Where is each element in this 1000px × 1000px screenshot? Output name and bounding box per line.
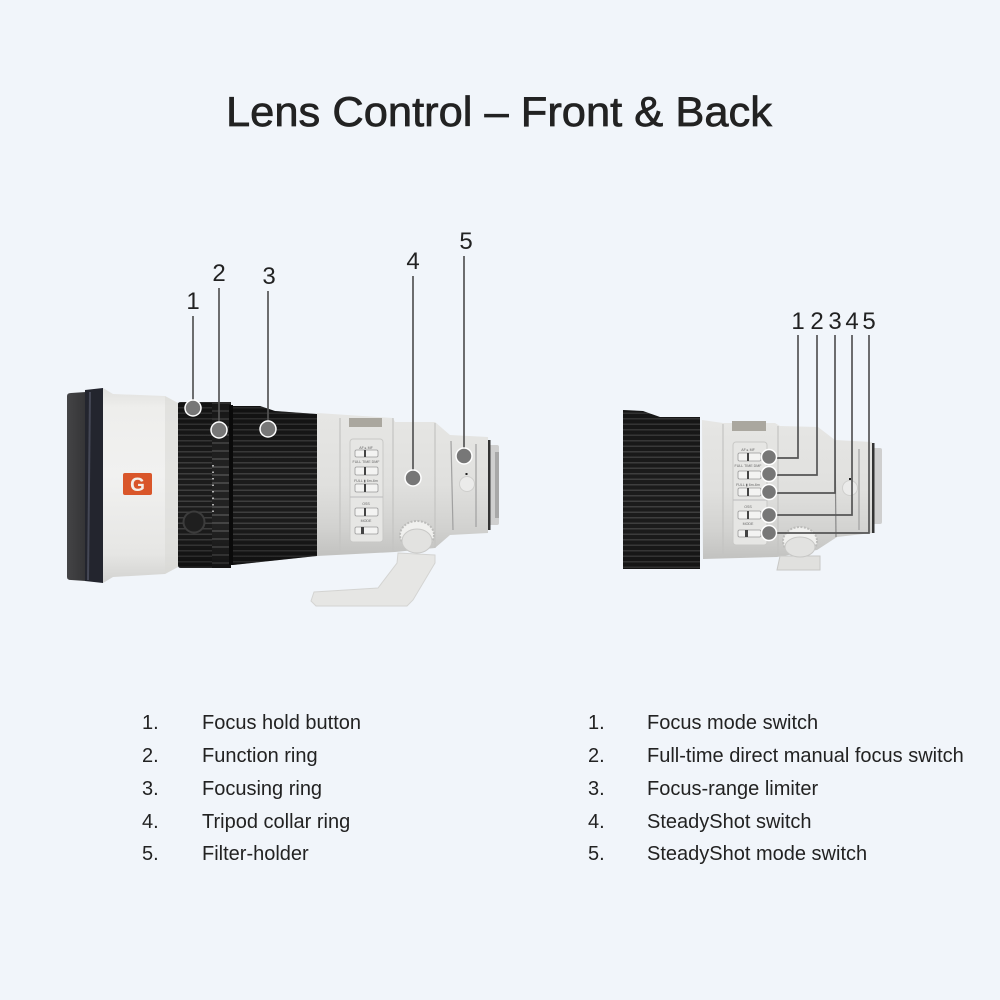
tripod foot bbox=[311, 553, 435, 606]
callout 1: 1 bbox=[791, 308, 805, 335]
legend: back controls: 3. bbox=[588, 778, 605, 800]
title: Lens Control – Front & Back bbox=[226, 88, 773, 135]
switch panel: FULL ▮ 6m-6m bbox=[354, 479, 378, 483]
callout 3: 3 bbox=[262, 263, 276, 290]
focusing ring bbox=[233, 406, 317, 565]
filter-holder knob bbox=[842, 478, 858, 496]
white front barrel bbox=[103, 388, 178, 583]
callout 5 bbox=[762, 308, 876, 540]
barrel shoulder shading bbox=[165, 396, 178, 574]
legend: back controls: 1. bbox=[588, 712, 605, 734]
callout 1: 1 bbox=[186, 288, 200, 315]
callout 5: 5 bbox=[459, 228, 473, 255]
lens body bbox=[702, 420, 872, 559]
AF window bbox=[732, 421, 766, 431]
legend: front controls: 1. bbox=[142, 712, 159, 734]
callout 1 bbox=[762, 308, 805, 464]
legend: front controls: 4. bbox=[142, 811, 159, 833]
lens mount bbox=[872, 443, 882, 533]
legend: front controls: Tripod collar ring bbox=[202, 811, 350, 833]
legend: front controls: Focus hold button bbox=[202, 712, 361, 734]
focus hold button bbox=[184, 512, 204, 532]
switch panel: FULL TIME DMF bbox=[353, 460, 380, 464]
AF window bbox=[349, 418, 382, 427]
callout 4: 4 bbox=[845, 308, 859, 335]
G badge bbox=[123, 473, 152, 496]
switch panel: MODE bbox=[743, 522, 754, 526]
function ring bbox=[212, 402, 231, 568]
legend: front controls: 5. bbox=[142, 843, 159, 865]
switch panel: FULL TIME DMF bbox=[735, 464, 762, 468]
switch panel: AF ▸ MF bbox=[741, 448, 756, 452]
legend: back controls: SteadyShot switch bbox=[647, 811, 812, 833]
back callouts bbox=[762, 308, 876, 540]
legend: back controls: 2. bbox=[588, 745, 605, 767]
callout 3 bbox=[762, 308, 842, 500]
legend: back controls bbox=[588, 712, 964, 865]
switch panel: OSS bbox=[362, 502, 370, 506]
front view lens illustration bbox=[67, 388, 499, 606]
legend: back controls: Full-time direct manual focus switch bbox=[647, 745, 964, 767]
callout 2: 2 bbox=[810, 308, 824, 335]
switch panel: AF ▸ MF bbox=[359, 446, 374, 450]
callout 4: 4 bbox=[406, 248, 420, 275]
legend: front controls: 2. bbox=[142, 745, 159, 767]
callout 4 bbox=[405, 248, 421, 486]
black focusing ring bbox=[623, 410, 700, 569]
lens mount bbox=[488, 440, 499, 530]
tripod collar knob bbox=[400, 521, 434, 553]
back view lens illustration bbox=[623, 410, 882, 570]
tripod collar knob bbox=[783, 527, 817, 557]
legend: back controls: SteadyShot mode switch bbox=[647, 843, 867, 865]
filter-holder knob bbox=[460, 473, 474, 492]
callout 5 bbox=[456, 228, 473, 464]
legend: front controls: Focusing ring bbox=[202, 778, 322, 800]
lens body white rear bbox=[317, 413, 488, 556]
switch panel: OSS bbox=[744, 505, 752, 509]
callout 3 bbox=[260, 263, 276, 437]
legend: front controls bbox=[142, 712, 361, 865]
switch panel: MODE bbox=[361, 519, 372, 523]
legend: back controls: Focus mode switch bbox=[647, 712, 818, 734]
callout 2: 2 bbox=[212, 260, 226, 287]
legend: back controls: 5. bbox=[588, 843, 605, 865]
body seams bbox=[723, 424, 859, 556]
legend: front controls: Filter-holder bbox=[202, 843, 309, 865]
focus hold section bbox=[178, 402, 212, 568]
legend: back controls: 4. bbox=[588, 811, 605, 833]
front callouts bbox=[185, 228, 473, 486]
hood front ring bbox=[85, 388, 103, 583]
gap between rings bbox=[229, 405, 233, 565]
switch panel bbox=[350, 439, 383, 542]
switch panel: FULL ▮ 6m-6m bbox=[736, 483, 760, 487]
callout 2 bbox=[211, 260, 227, 438]
lens hood bbox=[67, 392, 86, 581]
tripod foot base bbox=[777, 556, 820, 570]
callout 1 bbox=[185, 288, 201, 416]
callout 4 bbox=[762, 308, 859, 522]
legend: front controls: Function ring bbox=[202, 745, 318, 767]
callout 2 bbox=[762, 308, 824, 482]
ring highlights bbox=[88, 392, 90, 580]
switch panel bbox=[733, 442, 767, 545]
callout 5: 5 bbox=[862, 308, 876, 335]
body seams and filter-holder slots bbox=[340, 418, 476, 552]
G badge: G bbox=[130, 475, 145, 496]
callout 3: 3 bbox=[828, 308, 842, 335]
legend: front controls: 3. bbox=[142, 778, 159, 800]
legend: back controls: Focus-range limiter bbox=[647, 778, 819, 800]
